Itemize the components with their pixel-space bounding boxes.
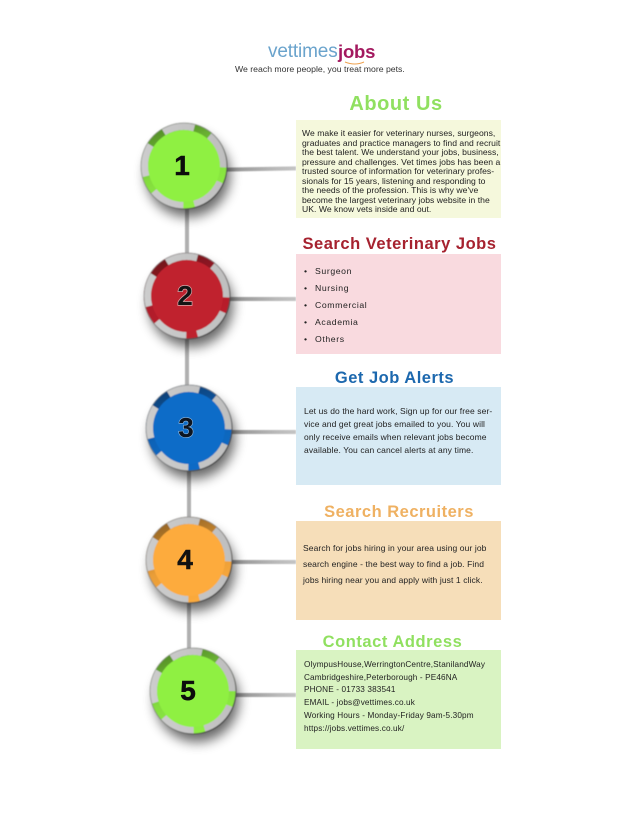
panel: job alerts text: Let us do the hard work, Sign up for our free ser- bbox=[304, 406, 492, 416]
connector: horizontal 4 bbox=[230, 560, 296, 564]
step badge 5 bbox=[146, 646, 248, 751]
panel: about us text: the best talent. We understand your jobs, business, bbox=[302, 147, 499, 157]
step badge 1: 1 bbox=[174, 150, 190, 181]
heading: Search Recruiters: Search Recruiters bbox=[324, 503, 474, 521]
step badge 3 bbox=[142, 384, 244, 488]
heading: Contact Address: Contact Address bbox=[323, 633, 462, 651]
panel: contact details: EMAIL - jobs@vettimes.co.uk bbox=[304, 698, 415, 707]
logo smile bbox=[344, 62, 364, 64]
step badge 1 bbox=[137, 122, 239, 226]
panel: job alerts text: vice and get great jobs emailed to you. You will bbox=[304, 419, 485, 429]
panel: about us text: pressure and challenges. Vet times jobs has been a bbox=[302, 156, 500, 166]
connector: horizontal 1 bbox=[225, 166, 296, 172]
step badge 4 bbox=[142, 516, 244, 620]
panel: contact details bbox=[296, 650, 501, 749]
tagline: We reach more people, you treat more pets. bbox=[235, 64, 405, 74]
panel: about us text: trusted source of information for veterinary profes- bbox=[302, 166, 494, 176]
panel: about us text: UK. We know vets inside and out. bbox=[302, 204, 431, 214]
step badge 4: 4 bbox=[177, 544, 193, 575]
list item: Others: • bbox=[304, 334, 308, 344]
panel: about us text bbox=[296, 120, 501, 218]
panel: about us text: We make it easier for veterinary nurses, surgeons, bbox=[302, 128, 495, 138]
connector: vertical 2-3 bbox=[185, 330, 189, 392]
panel: job alerts text: only receive emails when relevant jobs become bbox=[304, 432, 487, 442]
logo wordmark: jobs: jobs bbox=[338, 41, 375, 62]
list item: Surgeon: • bbox=[304, 266, 308, 276]
panel: about us text: sionals for 15 years, listening and responding to bbox=[302, 176, 485, 186]
heading: About Us: About Us bbox=[349, 93, 443, 115]
panel: about us text: become the largest veterinary jobs website in the bbox=[302, 194, 490, 204]
panel: contact details: Cambridgeshire,Peterborough - PE46NA bbox=[304, 673, 457, 682]
connector: horizontal 3 bbox=[230, 430, 296, 434]
panel: about us text: the needs of the profession. This is why we've bbox=[302, 185, 478, 195]
step badge 3: 3 bbox=[178, 412, 193, 443]
list item: Others: Others bbox=[315, 334, 345, 344]
step badge 2 bbox=[140, 252, 242, 356]
step badge 5: 5 bbox=[180, 675, 195, 706]
logo wordmark: vettimes: vettimes bbox=[268, 41, 338, 62]
logo bbox=[268, 41, 375, 64]
panel: contact details: Working Hours - Monday-Friday 9am-5.30pm bbox=[304, 711, 474, 720]
panel: contact details: PHONE - 01733 383541 bbox=[304, 685, 396, 694]
panel: recruiters text bbox=[296, 521, 501, 620]
panel: job alerts text bbox=[296, 387, 501, 485]
panel: contact details: OlympusHouse,WerringtonCentre,StanilandWay bbox=[304, 660, 485, 669]
panel: recruiters text: jobs hiring near you and apply with just 1 click. bbox=[303, 575, 483, 585]
step badge 2: 2 bbox=[177, 280, 192, 311]
list item: Commercial: • bbox=[304, 300, 308, 310]
panel: recruiters text: Search for jobs hiring in your area using our job bbox=[303, 543, 486, 553]
heading: Get Job Alerts: Get Job Alerts bbox=[335, 369, 454, 387]
panel: contact details: https://jobs.vettimes.co.uk/ bbox=[304, 724, 404, 733]
connector: horizontal 5 bbox=[234, 693, 296, 697]
connector: horizontal 2 bbox=[228, 297, 296, 301]
panel: recruiters text: search engine - the best way to find a job. Find bbox=[303, 559, 484, 569]
list item: Commercial: Commercial bbox=[315, 300, 367, 310]
connector: vertical 4-5 bbox=[187, 595, 191, 655]
panel: job types list bbox=[296, 254, 501, 354]
connector: vertical 3-4 bbox=[187, 462, 191, 522]
list item: Nursing: Nursing bbox=[315, 283, 349, 293]
connector: vertical 1-2 bbox=[185, 200, 189, 260]
list item: Academia: • bbox=[304, 317, 308, 327]
heading: Search Veterinary Jobs: Search Veterinary Jobs bbox=[303, 235, 496, 253]
panel: job alerts text: available. You can cancel alerts at any time. bbox=[304, 445, 473, 455]
list item: Academia: Academia bbox=[315, 317, 358, 327]
panel: about us text: graduates and practice managers to find and recruit bbox=[302, 138, 500, 148]
list item: Nursing: • bbox=[304, 283, 308, 293]
list item: Surgeon: Surgeon bbox=[315, 266, 352, 276]
